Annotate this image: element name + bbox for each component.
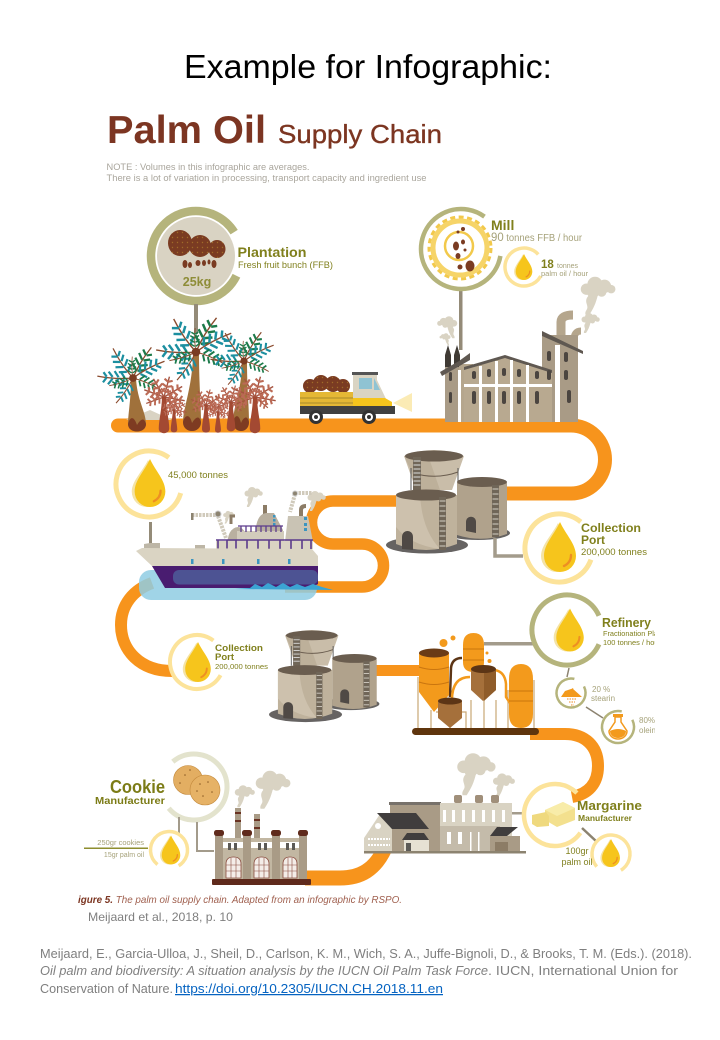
- truck chassis: [300, 406, 395, 414]
- mill ring: [415, 203, 507, 295]
- icon: cookies: [174, 766, 220, 805]
- plantation label: Plantation: [238, 244, 306, 260]
- icon: butter: [532, 802, 575, 827]
- ring: [148, 741, 240, 833]
- panel: cookie: [84, 741, 240, 876]
- label: Manufacturer: [578, 813, 633, 823]
- heading: Palm Oil Supply Chain: Palm Oil: [107, 109, 266, 152]
- ship: [136, 487, 333, 600]
- factory connector: [512, 812, 524, 814]
- small house: [404, 840, 429, 852]
- panel: ship capacity: [108, 443, 228, 544]
- note text: [106, 162, 426, 184]
- yellow ring: [108, 443, 190, 525]
- stem: [149, 522, 152, 544]
- reference: Meijaard, E., Garcia-Ulloa, J., Sheil, D., Carlson, K. M., Wich, S. A., Juffe-Bignoli, D., & Brooks, T. M. (Eds.). (2018).: [40, 947, 692, 961]
- note text: NOTE : Volumes in this infographic are averages.: [106, 162, 310, 173]
- stearin label: 20 %: [592, 685, 610, 694]
- label: Fractionation Plant: [603, 629, 665, 638]
- bubbles: [440, 636, 492, 663]
- red young palms: [142, 375, 277, 433]
- mill label: Mill: [491, 217, 514, 233]
- panel: mill: [415, 203, 615, 422]
- cookie amounts: 250gr cookies: [97, 838, 144, 847]
- olein circle: [597, 706, 639, 748]
- connector to refinery circle: [484, 642, 534, 646]
- main hall: [390, 804, 440, 852]
- mill smoke: [437, 277, 615, 345]
- wheels: [309, 410, 376, 424]
- plantation label: Fresh fruit bunch (FFB): [238, 260, 333, 271]
- smoke: [457, 753, 515, 797]
- truck bed: [300, 392, 353, 407]
- ring: [160, 625, 234, 699]
- plantation disc: [157, 217, 235, 295]
- truck cab: [352, 372, 392, 407]
- panel: plantation: [136, 196, 333, 334]
- icon: oil drop: [554, 608, 584, 652]
- fruit load: [303, 375, 350, 393]
- olein label: 80%: [639, 716, 655, 725]
- base: [212, 879, 311, 885]
- palm 1: [97, 343, 167, 432]
- stacks: [454, 795, 499, 803]
- label: Cookie: [110, 776, 165, 797]
- reference: Oil palm and biodiversity: A situation analysis by the IUCN Oil Palm Task Force: [40, 964, 488, 978]
- superstructure: [216, 505, 313, 549]
- blue stripe: [173, 570, 318, 584]
- vessel bottom: [438, 698, 462, 728]
- vessel top: [463, 633, 484, 672]
- label: Margarine: [577, 799, 642, 813]
- plantation label: [238, 244, 333, 271]
- mill output: palm oil / hour: [541, 269, 589, 278]
- label: Port: [215, 652, 235, 663]
- towers: [215, 835, 307, 880]
- portholes: [191, 559, 290, 564]
- panel: collection port upper: [515, 504, 648, 592]
- reference: [40, 947, 692, 996]
- stearin circle: [552, 674, 590, 712]
- label: [602, 618, 655, 645]
- label: 100 tonnes / hour: [603, 638, 661, 647]
- arched windows: [226, 857, 297, 878]
- panel: margarine: [512, 772, 642, 881]
- label: Collection: [215, 643, 263, 654]
- ground mound: [126, 410, 172, 420]
- body: [217, 838, 307, 880]
- connectors: [179, 817, 214, 851]
- mill output: 18 tonnes: [541, 259, 579, 271]
- left house: [364, 814, 392, 852]
- label: Refinery: [602, 615, 652, 630]
- storage tanks: lower: [269, 630, 379, 722]
- label: [577, 799, 642, 823]
- smoke: [235, 771, 290, 809]
- mill stem: [459, 290, 462, 350]
- oil amount: 100gr: [565, 846, 589, 856]
- drop circle: [584, 827, 638, 881]
- palm trees: [97, 313, 277, 433]
- pipes: [450, 658, 462, 697]
- cookie amounts: [84, 838, 148, 859]
- dark stacks: [445, 345, 460, 373]
- olein label: olein: [639, 726, 656, 735]
- storage tanks: upper: [386, 450, 510, 554]
- capacity label: 45,000 tonnes: [168, 470, 228, 481]
- figure caption: igure 5. The palm oil supply chain. Adapted from an infographic by RSPO.: [78, 894, 402, 906]
- heading: Palm Oil Supply Chain: Supply Chain: [278, 119, 442, 149]
- frames: [418, 677, 534, 730]
- stearin label: stearin: [591, 694, 615, 703]
- icon: oil drop: [541, 522, 576, 572]
- truck: [300, 372, 412, 424]
- connector: [582, 828, 597, 842]
- orange supply chain pipeline: [111, 418, 605, 878]
- ring: [515, 504, 603, 592]
- cookie amounts: 15gr palm oil: [104, 852, 144, 859]
- beige hull: [136, 548, 318, 566]
- margarine factory: [364, 753, 526, 854]
- right house: [490, 836, 520, 852]
- base: [412, 728, 539, 735]
- label: [95, 776, 165, 807]
- orange pipes: [452, 670, 510, 703]
- citation note: Meijaard et al., 2018, p. 10: [88, 910, 233, 924]
- label: 200,000 tonnes: [215, 662, 268, 671]
- label: Collection: [581, 521, 641, 535]
- icon: oil drop: [183, 642, 211, 682]
- connector: tanks to port: [495, 538, 523, 556]
- infographic figure: [78, 109, 665, 906]
- vessel left: [419, 648, 449, 712]
- label: Manufacturer: [95, 796, 165, 807]
- mill label: 90 tonnes FFB / hour: [491, 230, 583, 244]
- stem: [194, 304, 198, 334]
- title: Example for Infographic:: [184, 48, 552, 85]
- plantation ring: [136, 196, 256, 316]
- drop circle: [143, 824, 195, 876]
- label: Port: [581, 533, 605, 547]
- icon: gear: [429, 217, 491, 279]
- deck boxes: [144, 543, 205, 550]
- icon: oil drop: [132, 459, 165, 507]
- crane 2: [290, 491, 312, 512]
- ring: [521, 584, 613, 676]
- ground line: [364, 851, 526, 854]
- reference: Conservation of Nature.: [40, 982, 173, 996]
- palm 3: [210, 328, 276, 431]
- weight label: 25kg: [183, 275, 211, 289]
- chimneys: [235, 808, 260, 838]
- oil amount: palm oil: [561, 857, 593, 867]
- mill factory: [440, 315, 583, 422]
- label: [581, 521, 648, 557]
- waves: [235, 583, 333, 590]
- label: 200,000 tonnes: [581, 547, 648, 557]
- cookie factory: [212, 771, 311, 885]
- tower caps: [214, 830, 308, 836]
- icon: fruit bunch: [168, 230, 226, 268]
- panel: refinery: [529, 592, 655, 744]
- label: [215, 643, 268, 671]
- note text: There is a lot of variation in processing, transport capacity and ingredient use: [106, 173, 426, 184]
- oil amount: [561, 846, 593, 867]
- panel: collection port lower: [160, 625, 268, 699]
- refinery plant: [412, 633, 539, 735]
- small drop circle: [498, 241, 550, 293]
- ship smoke: [223, 487, 326, 524]
- connectors: [567, 668, 603, 718]
- stearin label: [591, 685, 615, 703]
- olein label: [639, 717, 655, 733]
- chimneys: [561, 315, 581, 370]
- reference: https://doi.org/10.2305/IUCN.CH.2018.11.en: [175, 982, 443, 996]
- purple hull: [152, 566, 318, 588]
- mill label: [491, 217, 583, 244]
- light beam: [393, 393, 412, 412]
- vessel right: [509, 664, 533, 728]
- vessel centre: [471, 665, 496, 701]
- crane 1: [191, 511, 226, 538]
- palm 2: [156, 313, 234, 431]
- heading: Palm Oil Supply Chain: [107, 109, 442, 152]
- reference: . IUCN, International Union for: [488, 964, 678, 978]
- railings: [216, 526, 313, 549]
- ring: [512, 772, 598, 858]
- mill output: [541, 259, 589, 278]
- water: [139, 570, 317, 600]
